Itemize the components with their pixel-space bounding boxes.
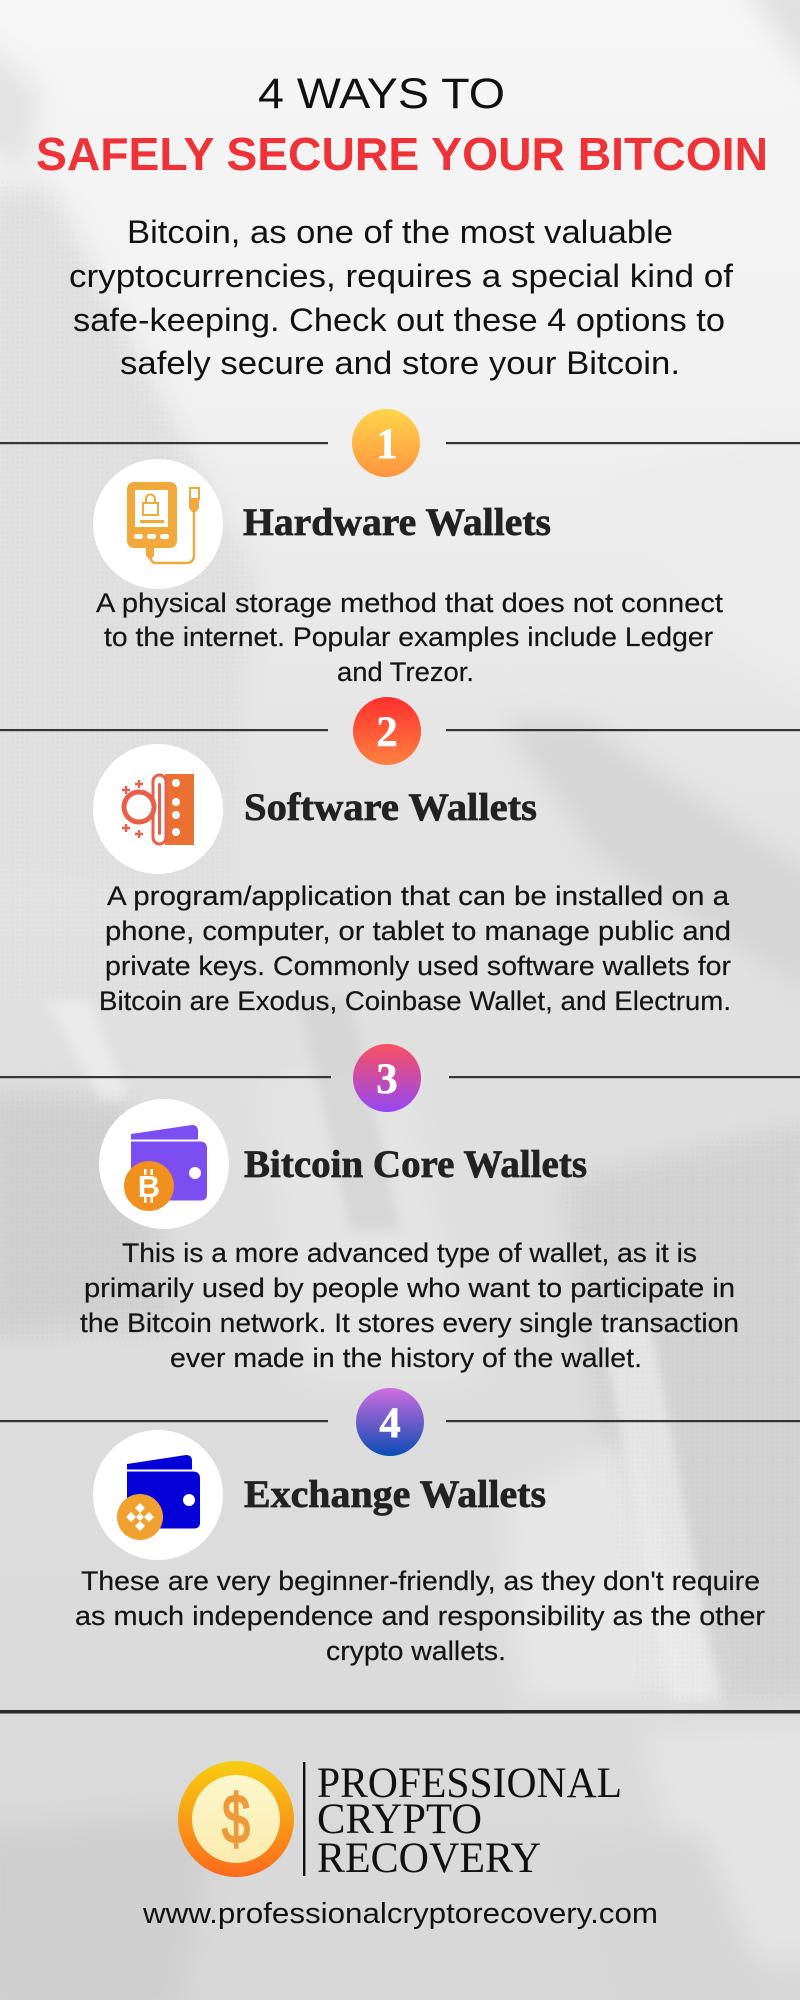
divider with number badge 1 <box>0 409 800 477</box>
divider with number badge 3: 3 <box>376 1056 398 1103</box>
section 4: exchange wallets <box>0 1388 800 1666</box>
body text: bitcoin core wallets: primarily used by people who want to participate in <box>84 1273 735 1303</box>
divider with number badge 3 <box>0 1044 800 1112</box>
logo wordmark: RECOVERY <box>317 1835 541 1882</box>
divider with number badge 4 <box>0 1388 800 1456</box>
divider with number badge 2: 2 <box>376 709 398 756</box>
divider with number badge 4: 4 <box>379 1400 401 1447</box>
icon: bitcoin wallet: B <box>138 1169 160 1204</box>
logo wordmark: CRYPTO <box>317 1796 482 1843</box>
body text: exchange wallets: as much independence and responsibility as the other <box>75 1601 765 1631</box>
title line one: 4 WAYS TO <box>258 70 505 118</box>
icon: dollar coin: $ <box>222 1780 250 1858</box>
intro text: Bitcoin, as one of the most valuable <box>127 214 673 250</box>
body text: hardware wallets: A physical storage method that does not connect <box>96 588 724 618</box>
body text: software wallets: phone, computer, or tablet to manage public and <box>105 916 731 946</box>
icon: dollar coin <box>178 1761 294 1877</box>
heading: bitcoin core wallets: Bitcoin Core Wallets <box>244 1143 587 1186</box>
title line two: SAFELY SECURE YOUR BITCOIN <box>36 128 768 180</box>
section 2: software wallets <box>0 697 800 1016</box>
intro text: safely secure and store your Bitcoin. <box>120 345 680 381</box>
body text: software wallets: Bitcoin are Exodus, Coinbase Wallet, and Electrum. <box>99 986 731 1016</box>
logo wordmark <box>317 1760 622 1882</box>
icon: software wallet <box>93 744 223 874</box>
body text: hardware wallets: to the internet. Popular examples include Ledger <box>104 622 713 652</box>
divider with number badge 2 <box>0 697 800 765</box>
body text: hardware wallets: and Trezor. <box>337 657 474 687</box>
section 1: hardware wallets <box>0 409 800 687</box>
icon: bitcoin wallet <box>99 1099 229 1229</box>
intro text: safe-keeping. Check out these 4 options to <box>73 302 725 338</box>
heading: hardware wallets: Hardware Wallets <box>243 501 551 544</box>
body text: software wallets: A program/application that can be installed on a <box>107 881 730 911</box>
heading: exchange wallets: Exchange Wallets <box>244 1473 546 1516</box>
icon: exchange wallet <box>93 1430 223 1560</box>
body text: software wallets <box>99 881 731 1016</box>
body text: exchange wallets: crypto wallets. <box>326 1636 506 1666</box>
heading: software wallets: Software Wallets <box>244 786 537 829</box>
body text: hardware wallets <box>96 588 724 687</box>
body text: bitcoin core wallets: This is a more advanced type of wallet, as it is <box>122 1238 697 1268</box>
intro text: cryptocurrencies, requires a special kind of <box>69 258 734 294</box>
footer divider <box>0 1710 800 1714</box>
body text: bitcoin core wallets: the Bitcoin network. It stores every single transaction <box>80 1308 739 1338</box>
footer logo <box>178 1760 622 1882</box>
body text: software wallets: private keys. Commonly used software wallets for <box>105 951 731 981</box>
icon: hardware wallet <box>93 459 223 589</box>
intro text <box>69 214 734 381</box>
logo wordmark: PROFESSIONAL <box>317 1760 622 1807</box>
body text: exchange wallets <box>75 1566 765 1666</box>
body text: exchange wallets: These are very beginner-friendly, as they don't require <box>81 1566 760 1596</box>
section 3: bitcoin core wallets <box>0 1044 800 1373</box>
title <box>36 70 768 180</box>
website url: www.professionalcryptorecovery.com <box>142 1898 658 1930</box>
divider with number badge 1: 1 <box>376 421 398 468</box>
body text: bitcoin core wallets: ever made in the history of the wallet. <box>170 1343 642 1373</box>
body text: bitcoin core wallets <box>80 1238 739 1373</box>
